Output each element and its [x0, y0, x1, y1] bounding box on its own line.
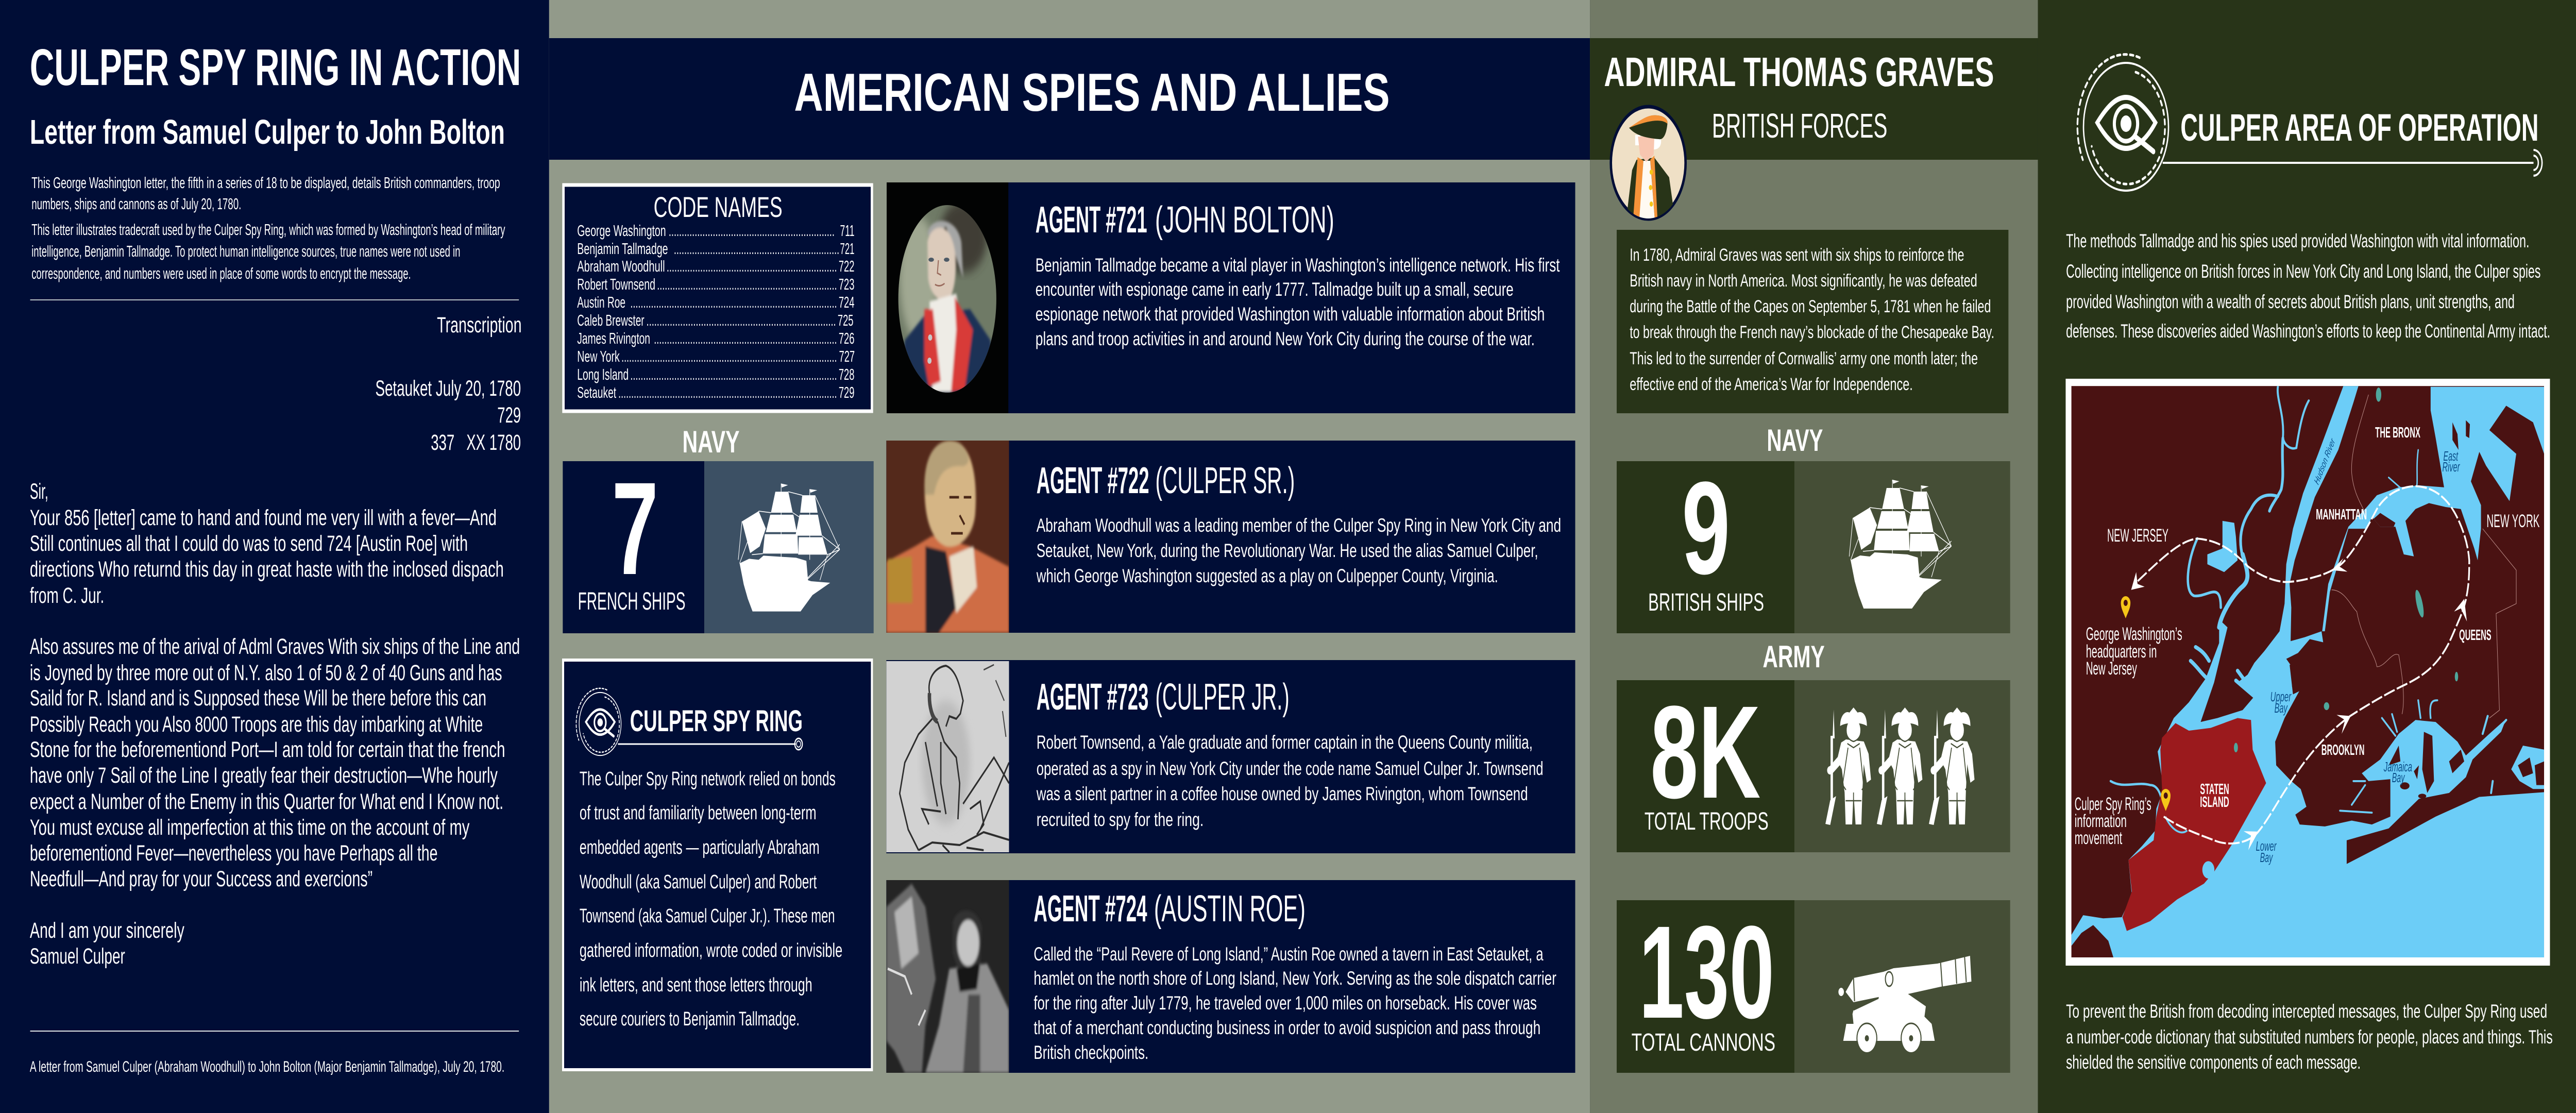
spy ring description: secure couriers to Benjamin Tallmadge. [580, 1008, 800, 1030]
icon: location pin New Jersey [2121, 596, 2130, 618]
army stat: total cannons: TOTAL CANNONS [1632, 1028, 1775, 1056]
panel: Culper area of operation [2038, 0, 2576, 1113]
code names box: Setauket [577, 383, 617, 401]
letter body [30, 479, 520, 968]
letter body: Your 856 [letter] came to hand and found me very ill with a fever—And [30, 505, 497, 530]
letter body: And I am your sincerely [30, 918, 184, 942]
Admiral Graves biography: In 1780, Admiral Graves was sent with six ships to reinforce the [1630, 246, 1964, 265]
intro text [31, 174, 505, 282]
subtitle: Letter from Samuel Culper to John Bolton [30, 113, 505, 151]
agent heading [1037, 460, 1295, 501]
map labels: Bay [2392, 770, 2405, 785]
letter body: You must excuse all imperfection at this time on the account of my [30, 815, 470, 839]
intro text: provided Washington with a wealth of secrets about British plans, unit strengths, and [2066, 291, 2515, 312]
map labels: East [2444, 448, 2459, 464]
navy stat: French ships: 7 [612, 455, 658, 602]
code names box: 724 [839, 293, 854, 311]
Admiral Graves biography: to break through the French navy’s blockade of the Chesapeake Bay. [1630, 323, 1994, 342]
code names box: CODE NAMES [654, 192, 783, 224]
code names box: .................................................................. [667, 258, 837, 275]
code names box: 726 [839, 329, 854, 347]
spy ring description: Townsend (aka Samuel Culper Jr.). These men [580, 905, 835, 926]
code names box: Benjamin Tallmadge [577, 240, 668, 258]
code names box: 711 [840, 222, 854, 240]
Admiral Graves biography [1617, 230, 2008, 413]
agent bio [1033, 943, 1556, 1063]
agent heading: AGENT #721 [1036, 199, 1147, 240]
transcription date block: 729 [497, 402, 521, 427]
intro text: defenses. These discoveries aided Washington’s efforts to keep the Continental Army intact. [2066, 321, 2550, 342]
agent bio [1036, 255, 1560, 349]
closing text: shielded the sensitive components of each message. [2066, 1052, 2361, 1073]
agent bio: Abraham Woodhull was a leading member of the Culper Spy Ring in New York City and [1037, 515, 1561, 536]
letter body: from C. Jur. [30, 583, 104, 608]
code names box: ................................................................................ [630, 366, 837, 383]
letter body: Sir, [30, 479, 48, 503]
code names box: ......................................................................... [647, 312, 836, 329]
spy ring description: The Culper Spy Ring network relied on bonds [580, 768, 836, 789]
code names box: Caleb Brewster [577, 311, 645, 329]
Admiral Graves biography: British navy in North America. Most significantly, he was defeated [1630, 272, 1977, 291]
culper spy ring box [563, 660, 872, 1070]
letter body: is Joyned by three more out of N.Y. also 1 of 50 & 2 of 40 Guns and has [30, 660, 502, 685]
heading: AMERICAN SPIES AND ALLIES [794, 62, 1390, 122]
army stat: total troops: 8K [1650, 679, 1760, 826]
spy ring description: of trust and familiarity between long-term [580, 802, 817, 823]
army stat: total cannons [1617, 899, 2010, 1073]
code names box: Long Island [577, 365, 629, 383]
code names box: 727 [839, 347, 855, 365]
map labels: BROOKLYN [2321, 742, 2365, 758]
agent bio: Setauket, New York, during the Revolutionary War. He used the alias Samuel Culper, [1037, 540, 1538, 561]
spy ring description: ink letters, and sent those letters through [580, 974, 812, 996]
code names box: Robert Townsend [577, 275, 655, 293]
code names box: 729 [839, 383, 854, 401]
map labels: George Washington’s [2086, 624, 2182, 644]
agent bio: for the ring after July 1779, he traveled over 1,000 miles on horseback. His cover was [1033, 992, 1537, 1014]
letter body: Samuel Culper [30, 943, 125, 968]
agent bio [1036, 732, 1544, 830]
intro text: This George Washington letter, the fifth in a series of 18 to be displayed, details British commanders, troop [31, 174, 500, 192]
agent heading [1036, 199, 1334, 240]
portrait: Austin Roe engraving [886, 880, 1009, 1073]
agent bio: recruited to spy for the ring. [1037, 809, 1204, 830]
letter body: have only 7 Sail of the Line I greatly fear their destruction—Whe hourly [30, 763, 498, 787]
map labels [2075, 425, 2540, 865]
map labels: New Jersey [2086, 659, 2137, 679]
map labels: headquarters in [2086, 642, 2157, 662]
intro text: The methods Tallmadge and his spies used provided Washington with vital information. [2066, 230, 2530, 251]
Admiral Graves biography: during the Battle of the Capes on September 5, 1781 when he failed [1630, 297, 1991, 316]
agent bio: British checkpoints. [1033, 1042, 1148, 1063]
letter body: Still continues all that I could do was to send 724 [Austin Roe] with [30, 531, 468, 555]
portrait: Abraham Woodhull [886, 441, 1009, 633]
portrait: Benjamin Tallmadge [887, 182, 1008, 413]
agent bio: was a silent partner in a coffee house owned by James Rivington, whom Townsend [1036, 783, 1528, 804]
navy stat: British ships: 9 [1682, 454, 1730, 602]
letter body: Needfull—And pray for your Success and exercions” [30, 866, 372, 891]
icon: ship [1849, 480, 1952, 609]
letter body: Stone for the beforementiond Port—I am told for certain that the french [30, 737, 505, 762]
agent bio: operated as a spy in New York City under the code name Samuel Culper Jr. Townsend [1037, 758, 1544, 779]
closing text: a number-code dictionary that substituted numbers for people, places and things. This [2066, 1026, 2553, 1048]
spy ring description: Woodhull (aka Samuel Culper) and Robert [580, 871, 817, 892]
map of New York area [2065, 379, 2550, 966]
icon: location pin Staten Island [2161, 789, 2171, 811]
map labels: Lower [2256, 838, 2277, 854]
agent bio: Called the “Paul Revere of Long Island,” Austin Roe owned a tavern in East Setauket, a [1033, 943, 1544, 965]
code names box: ................................................................ [674, 241, 839, 258]
map labels: Bay [2275, 700, 2288, 716]
map labels: Jamaica [2383, 759, 2412, 774]
letter body: Saild for R. Island and is Supposed these Will be there before this can [30, 685, 486, 710]
agent bio: Robert Townsend, a Yale graduate and former captain in the Queens County militia, [1037, 732, 1533, 753]
spy ring description [580, 768, 842, 1030]
navy stat: French ships: FRENCH SHIPS [578, 587, 685, 615]
map labels: NEW YORK [2486, 511, 2540, 531]
code names box: 721 [840, 240, 854, 258]
spy ring description: embedded agents — particularly Abraham [580, 836, 820, 858]
letter body: Possibly Reach you Also 8000 Troops are this day imbarking at White [30, 712, 483, 736]
letter body: directions Who returnd this day in great haste with the inclosed dispach [30, 556, 504, 581]
agent bio: espionage network that provided Washington with valuable information about British [1036, 303, 1545, 325]
code names box: 723 [839, 275, 854, 293]
navy stat: British ships: NAVY [1767, 423, 1823, 458]
agent bio: which George Washington suggested as a play on Culpepper County, Virginia. [1036, 565, 1498, 586]
transcription date block: 337 XX 1780 [431, 430, 521, 454]
agent bio [1036, 515, 1561, 586]
letter body: expect a Number of the Enemy in this Quarter for What end I Know not. [30, 789, 503, 814]
code names box [564, 185, 872, 411]
Admiral Graves biography: effective end of the America’s War for Independence. [1630, 375, 1913, 394]
agent heading [1037, 676, 1290, 717]
arrow: information route [2131, 486, 2469, 850]
agent card 723 [886, 660, 1575, 853]
agent heading: (CULPER SR.) [1156, 460, 1295, 501]
agent heading [1033, 888, 1306, 929]
letter body: Also assures me of the arival of Adml Graves With six ships of the Line and [30, 634, 520, 659]
map labels: THE BRONX [2375, 425, 2420, 441]
code names box: James Rivington [577, 329, 650, 347]
navy stat: British ships: BRITISH SHIPS [1648, 588, 1764, 616]
agent card 721 [887, 182, 1575, 413]
navy stat: British ships [1617, 423, 2010, 633]
navy stat: French ships: NAVY [683, 425, 740, 459]
army stat: total troops: ARMY [1762, 639, 1825, 674]
agent card 724 [886, 880, 1575, 1073]
map labels: information [2075, 811, 2127, 831]
army stat: total troops: TOTAL TROOPS [1645, 807, 1769, 835]
agent heading: AGENT #723 [1037, 676, 1148, 717]
closing text: To prevent the British from decoding intercepted messages, the Culper Spy Ring used [2066, 1001, 2547, 1022]
code names box: ................................................................................ [630, 294, 837, 311]
intro text: correspondence, and numbers were used in place of some words to encrypt the message. [31, 264, 411, 282]
Admiral Graves biography: This led to the surrender of Cornwallis’ army one month later; the [1630, 349, 1978, 368]
code names box: ................................................................ [669, 223, 835, 240]
code names box: 722 [839, 257, 854, 275]
map labels: Culper Spy Ring’s [2075, 794, 2151, 814]
code names box: .................................................................................... [621, 348, 837, 365]
map labels: Hudson River [2312, 436, 2337, 486]
intro text: Collecting intelligence on British forces in New York City and Long Island, the Culper spies [2066, 261, 2540, 282]
code names box: ...................................................................... [657, 276, 837, 293]
icon: ship [738, 483, 840, 612]
portrait: Admiral Graves illustration [1611, 107, 1686, 219]
code names box: 728 [839, 365, 854, 383]
map labels: ISLAND [2200, 794, 2229, 811]
panel: letter transcription [0, 0, 549, 1113]
heading: CULPER AREA OF OPERATION [2180, 107, 2538, 149]
intro text: numbers, ships and cannons as of July 20, 1780. [31, 195, 241, 213]
agent heading: (AUSTIN ROE) [1154, 888, 1306, 929]
agent bio: Benjamin Tallmadge became a vital player in Washington’s intelligence network. His first [1036, 255, 1560, 276]
agent heading: AGENT #724 [1033, 888, 1147, 929]
agent heading: AGENT #722 [1037, 460, 1149, 501]
panel: American spies and allies [549, 0, 1590, 1113]
map labels: QUEENS [2459, 627, 2492, 644]
agent bio: encounter with espionage came in early 1777. Tallmadge built up a small, secure [1036, 279, 1514, 300]
map labels: River [2443, 459, 2461, 475]
spy ring description: gathered information, wrote coded or invisible [580, 939, 842, 961]
title: CULPER SPY RING IN ACTION [30, 38, 521, 96]
agent card 722 [886, 441, 1575, 633]
icon: cannon [1838, 956, 1972, 1053]
agent bio: hamlet on the north shore of Long Island, New York. Serving as the sole dispatch carrier [1033, 968, 1556, 989]
icon: eye and magnifier [576, 688, 802, 755]
intro text: intelligence, Benjamin Tallmadge. To protect human intelligence sources, true names were not used in [31, 242, 460, 260]
panel: British forces [1590, 0, 2038, 1113]
portrait: Robert Townsend sketch [886, 661, 1009, 852]
navy stat: French ships [563, 425, 874, 633]
transcription date block: Setauket July 20, 1780 [375, 376, 521, 400]
code names box: Abraham Woodhull [577, 257, 665, 275]
agent bio: that of a merchant conducting business in order to avoid suspicion and pass through [1033, 1017, 1540, 1038]
code names box: ..................................................................................... [618, 384, 837, 401]
culper spy ring box: CULPER SPY RING [630, 704, 803, 738]
army stat: total troops [1617, 639, 2010, 852]
intro text: This letter illustrates tradecraft used by the Culper Spy Ring, which was formed by Washington’s head of military [31, 221, 505, 239]
heading: ADMIRAL THOMAS GRAVES [1604, 49, 1994, 95]
icon: eye and magnifier [2077, 55, 2542, 191]
map labels: movement [2075, 828, 2123, 848]
transcription date block: Transcription [437, 312, 522, 337]
map labels: Upper [2270, 689, 2292, 704]
map labels: STATEN [2200, 781, 2229, 798]
transcription date block [375, 312, 522, 454]
code names box: New York [577, 347, 620, 365]
intro text [2066, 230, 2550, 342]
code names box: ....................................................................... [654, 330, 837, 347]
code names box: 725 [838, 311, 853, 329]
map labels: MANHATTAN [2316, 507, 2367, 523]
map labels: Bay [2260, 850, 2274, 865]
code names box: George Washington [577, 222, 666, 240]
subheading: BRITISH FORCES [1712, 107, 1888, 145]
letter caption: A letter from Samuel Culper (Abraham Woodhull) to John Bolton (Major Benjamin Tallmadge), July 20, 1780. [30, 1058, 504, 1075]
code names box: Austin Roe [577, 293, 625, 311]
agent heading: (JOHN BOLTON) [1155, 199, 1334, 240]
agent bio: plans and troop activities in and around New York City during the course of the war. [1036, 328, 1535, 349]
closing text [2066, 1001, 2553, 1073]
agent heading: (CULPER JR.) [1156, 676, 1290, 717]
map labels: NEW JERSEY [2107, 526, 2168, 546]
letter body: beforementiond Fever—nevertheless you have Perhaps all the [30, 840, 438, 865]
icon: soldiers [1825, 707, 1974, 825]
army stat: total cannons: 130 [1639, 899, 1774, 1046]
